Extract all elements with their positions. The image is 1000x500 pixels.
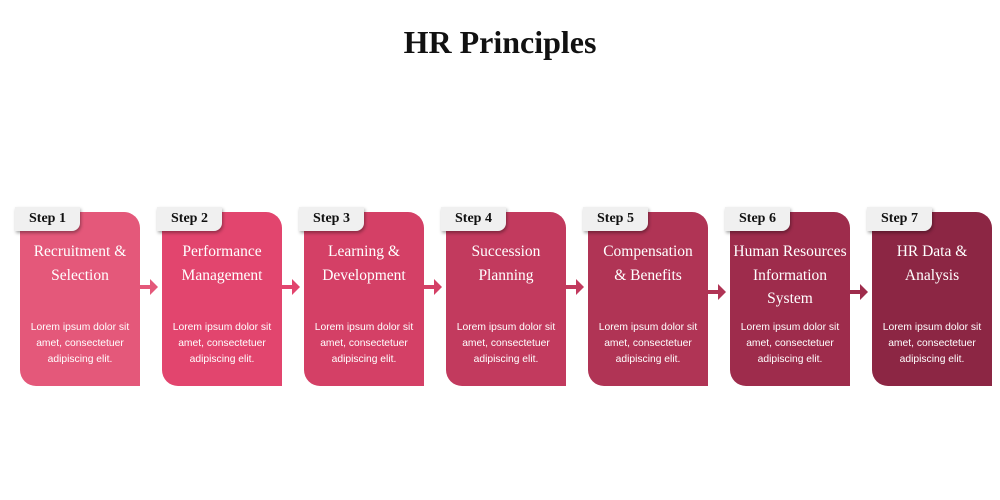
card: step 6: Information [753,266,827,284]
card: step 4: Lorem ipsum dolor sit [457,322,555,333]
card: step 3: Lorem ipsum dolor sit [315,322,413,333]
card: step 7: HR Data & [897,243,967,260]
card: step 5: & Benefits [614,266,682,284]
title: HR Principles [404,24,596,60]
card: step 6: amet, consectetuer [746,338,834,349]
card: step 1: Selection [51,266,109,284]
card: step 4: adipiscing elit. [474,354,538,365]
card: step 7: Step 7 [881,211,918,226]
card: step 3: Learning & [328,243,400,260]
card: step 2: Step 2 [171,211,208,226]
card: step 4: Step 4 [455,211,492,226]
card: step 6 [730,212,850,386]
arrow 5 [708,284,726,300]
card: step 2: amet, consectetuer [178,338,266,349]
card: step 6: System [767,290,813,307]
card: step 5 [588,212,708,386]
card: step 5: adipiscing elit. [616,354,680,365]
card: step 2: Lorem ipsum dolor sit [173,322,271,333]
arrow 2 [282,279,300,295]
card: step 1: Step 1 [29,211,66,226]
card: step 3: adipiscing elit. [332,354,396,365]
card: step 3 [304,212,424,386]
card: step 2: adipiscing elit. [190,354,254,365]
card: step 7: Lorem ipsum dolor sit [883,322,981,333]
card: step 1: Recruitment & [34,243,126,260]
card: step 1: Lorem ipsum dolor sit [31,322,129,333]
card: step 2 [162,212,282,386]
card: step 4: Planning [478,266,534,284]
card: step 2: Performance [182,243,262,260]
card: step 2: Management [182,266,262,284]
card: step 6: Human Resources [733,243,847,260]
card: step 1: adipiscing elit. [48,354,112,365]
card: step 3: amet, consectetuer [320,338,408,349]
card: step 7: adipiscing elit. [900,354,964,365]
card: step 5: amet, consectetuer [604,338,692,349]
card: step 6: Lorem ipsum dolor sit [741,322,839,333]
card: step 5: Compensation [603,243,693,260]
card: step 1: amet, consectetuer [36,338,124,349]
card: step 5: Step 5 [597,211,634,226]
card: step 6: Step 6 [739,211,776,226]
arrow 4 [566,279,584,295]
card: step 5: Lorem ipsum dolor sit [599,322,697,333]
card: step 1 [20,212,140,386]
card: step 3: Development [322,266,406,284]
card: step 7: Analysis [905,266,959,284]
card: step 4 [446,212,566,386]
arrow 6 [850,284,868,300]
card: step 7 [872,212,992,386]
arrow 3 [424,279,442,295]
card: step 6: adipiscing elit. [758,354,822,365]
arrow 1 [140,279,158,295]
card: step 3: Step 3 [313,211,350,226]
card: step 4: Succession [472,243,540,260]
card: step 7: amet, consectetuer [888,338,976,349]
card: step 4: amet, consectetuer [462,338,550,349]
